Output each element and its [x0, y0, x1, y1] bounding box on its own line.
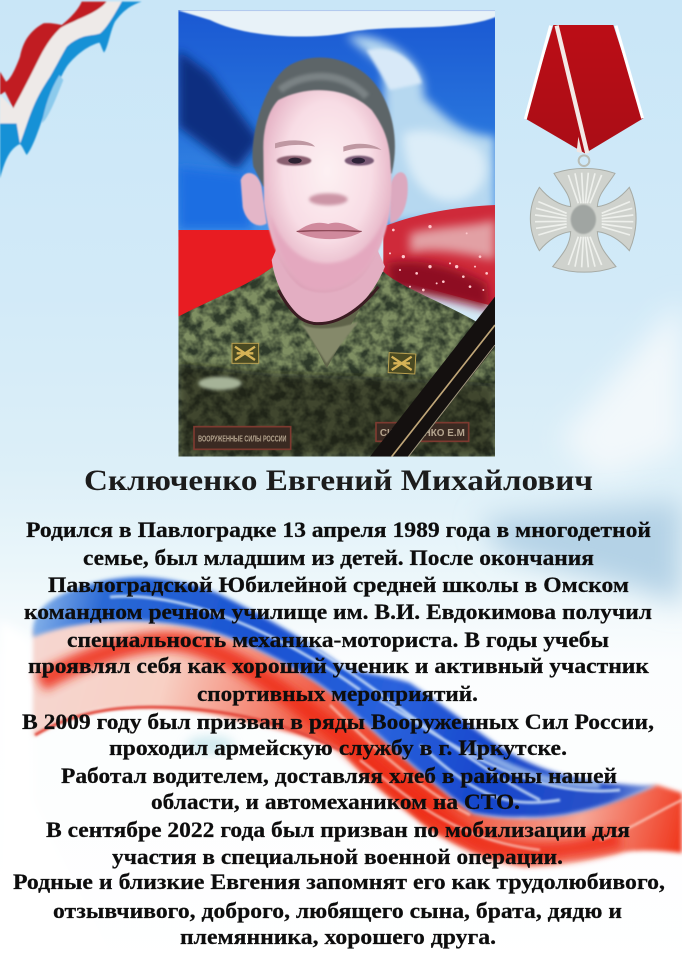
- chest name tapes: [194, 423, 469, 449]
- biography text: семье, был младшим из детей. После окончания: [83, 545, 594, 570]
- collar tabs: [232, 343, 416, 374]
- blue band: [33, 577, 657, 817]
- flag ribbon top left: [0, 2, 142, 178]
- head: [241, 57, 408, 293]
- red band: [33, 620, 682, 867]
- biography text: командном речном училище им. В.И. Евдокимова получил: [24, 599, 652, 624]
- biography text: В сентябре 2022 года был призван по мобилизации для: [46, 817, 630, 842]
- medal ribbon: [525, 25, 643, 153]
- name heading: Сключенко Евгений Михайлович: [84, 464, 593, 497]
- biography text: проходил армейскую службу в г. Иркутске.: [109, 735, 567, 760]
- biography text: Работал водителем, доставляя хлеб в районы нашей: [61, 763, 617, 788]
- biography text: [13, 517, 665, 949]
- biography text: В 2009 году был призван в ряды Вооруженных Сил России,: [22, 709, 654, 734]
- soldier: [178, 233, 495, 457]
- mourning ribbon: [370, 297, 495, 457]
- biography text: Павлоградской Юбилейной средней школы в Омском: [48, 572, 629, 597]
- wave highlights: [110, 596, 620, 803]
- medal: [525, 25, 643, 272]
- chest name tapes: ВООРУЖЕННЫЕ СИЛЫ РОССИИ: [198, 434, 287, 443]
- portrait photo: [177, 10, 497, 457]
- biography text: отзывчивого, доброго, любящего сына, брата, дядю и: [53, 898, 622, 923]
- ribbon blue: [0, 2, 142, 178]
- biography text: участия в специальной военной операции.: [112, 844, 563, 869]
- sparkles: [389, 225, 488, 291]
- decorative flag wave lower: [33, 577, 682, 867]
- silver cross: [530, 155, 636, 272]
- flag background: [177, 10, 497, 317]
- biography text: области, и автомехаником на СТО.: [151, 789, 520, 814]
- ribbon white: [0, 2, 122, 143]
- biography text: специальность механика-моториста. В годы учебы: [67, 627, 609, 652]
- biography text: спортивных мероприятий.: [197, 681, 478, 706]
- red core: [40, 641, 620, 852]
- biography text: Родные и близкие Евгения запомнят его как трудолюбивого,: [13, 869, 665, 894]
- chest name tapes: СКЛЮЧЕНКО Е.М: [380, 428, 465, 439]
- biography text: Родился в Павлоградке 13 апреля 1989 года в многодетной: [26, 517, 651, 542]
- biography text: племянника, хорошего друга.: [180, 924, 496, 949]
- biography text: проявлял себя как хороший ученик и активный участник: [28, 653, 649, 678]
- ribbon red: [0, 2, 107, 108]
